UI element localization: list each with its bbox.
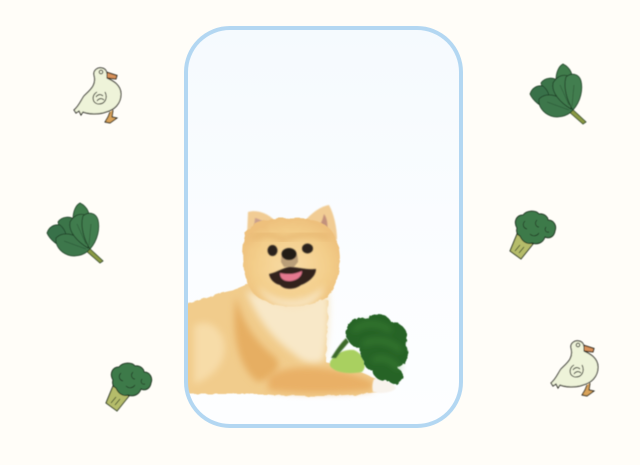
- icon: spinach left: [47, 203, 103, 263]
- photo frame border: [186, 28, 461, 426]
- dog: [186, 205, 396, 396]
- muzzle nose: [280, 254, 299, 268]
- tongue: [280, 271, 302, 281]
- icon: duck bottom right: [551, 341, 598, 396]
- infographic canvas: [46, 26, 600, 428]
- eyes: [268, 244, 316, 289]
- broccoli: [330, 314, 408, 384]
- dog body: [186, 284, 378, 396]
- icon: duck top left: [74, 68, 121, 123]
- head: [243, 219, 340, 307]
- icon: spinach top right: [530, 64, 586, 124]
- icon: broccoli right: [510, 211, 556, 259]
- ears: [246, 210, 274, 231]
- photo panel: dog with broccoli: [186, 28, 461, 426]
- mouth: [269, 267, 316, 289]
- white paw: [372, 379, 396, 393]
- icon: broccoli bottom left: [106, 363, 152, 411]
